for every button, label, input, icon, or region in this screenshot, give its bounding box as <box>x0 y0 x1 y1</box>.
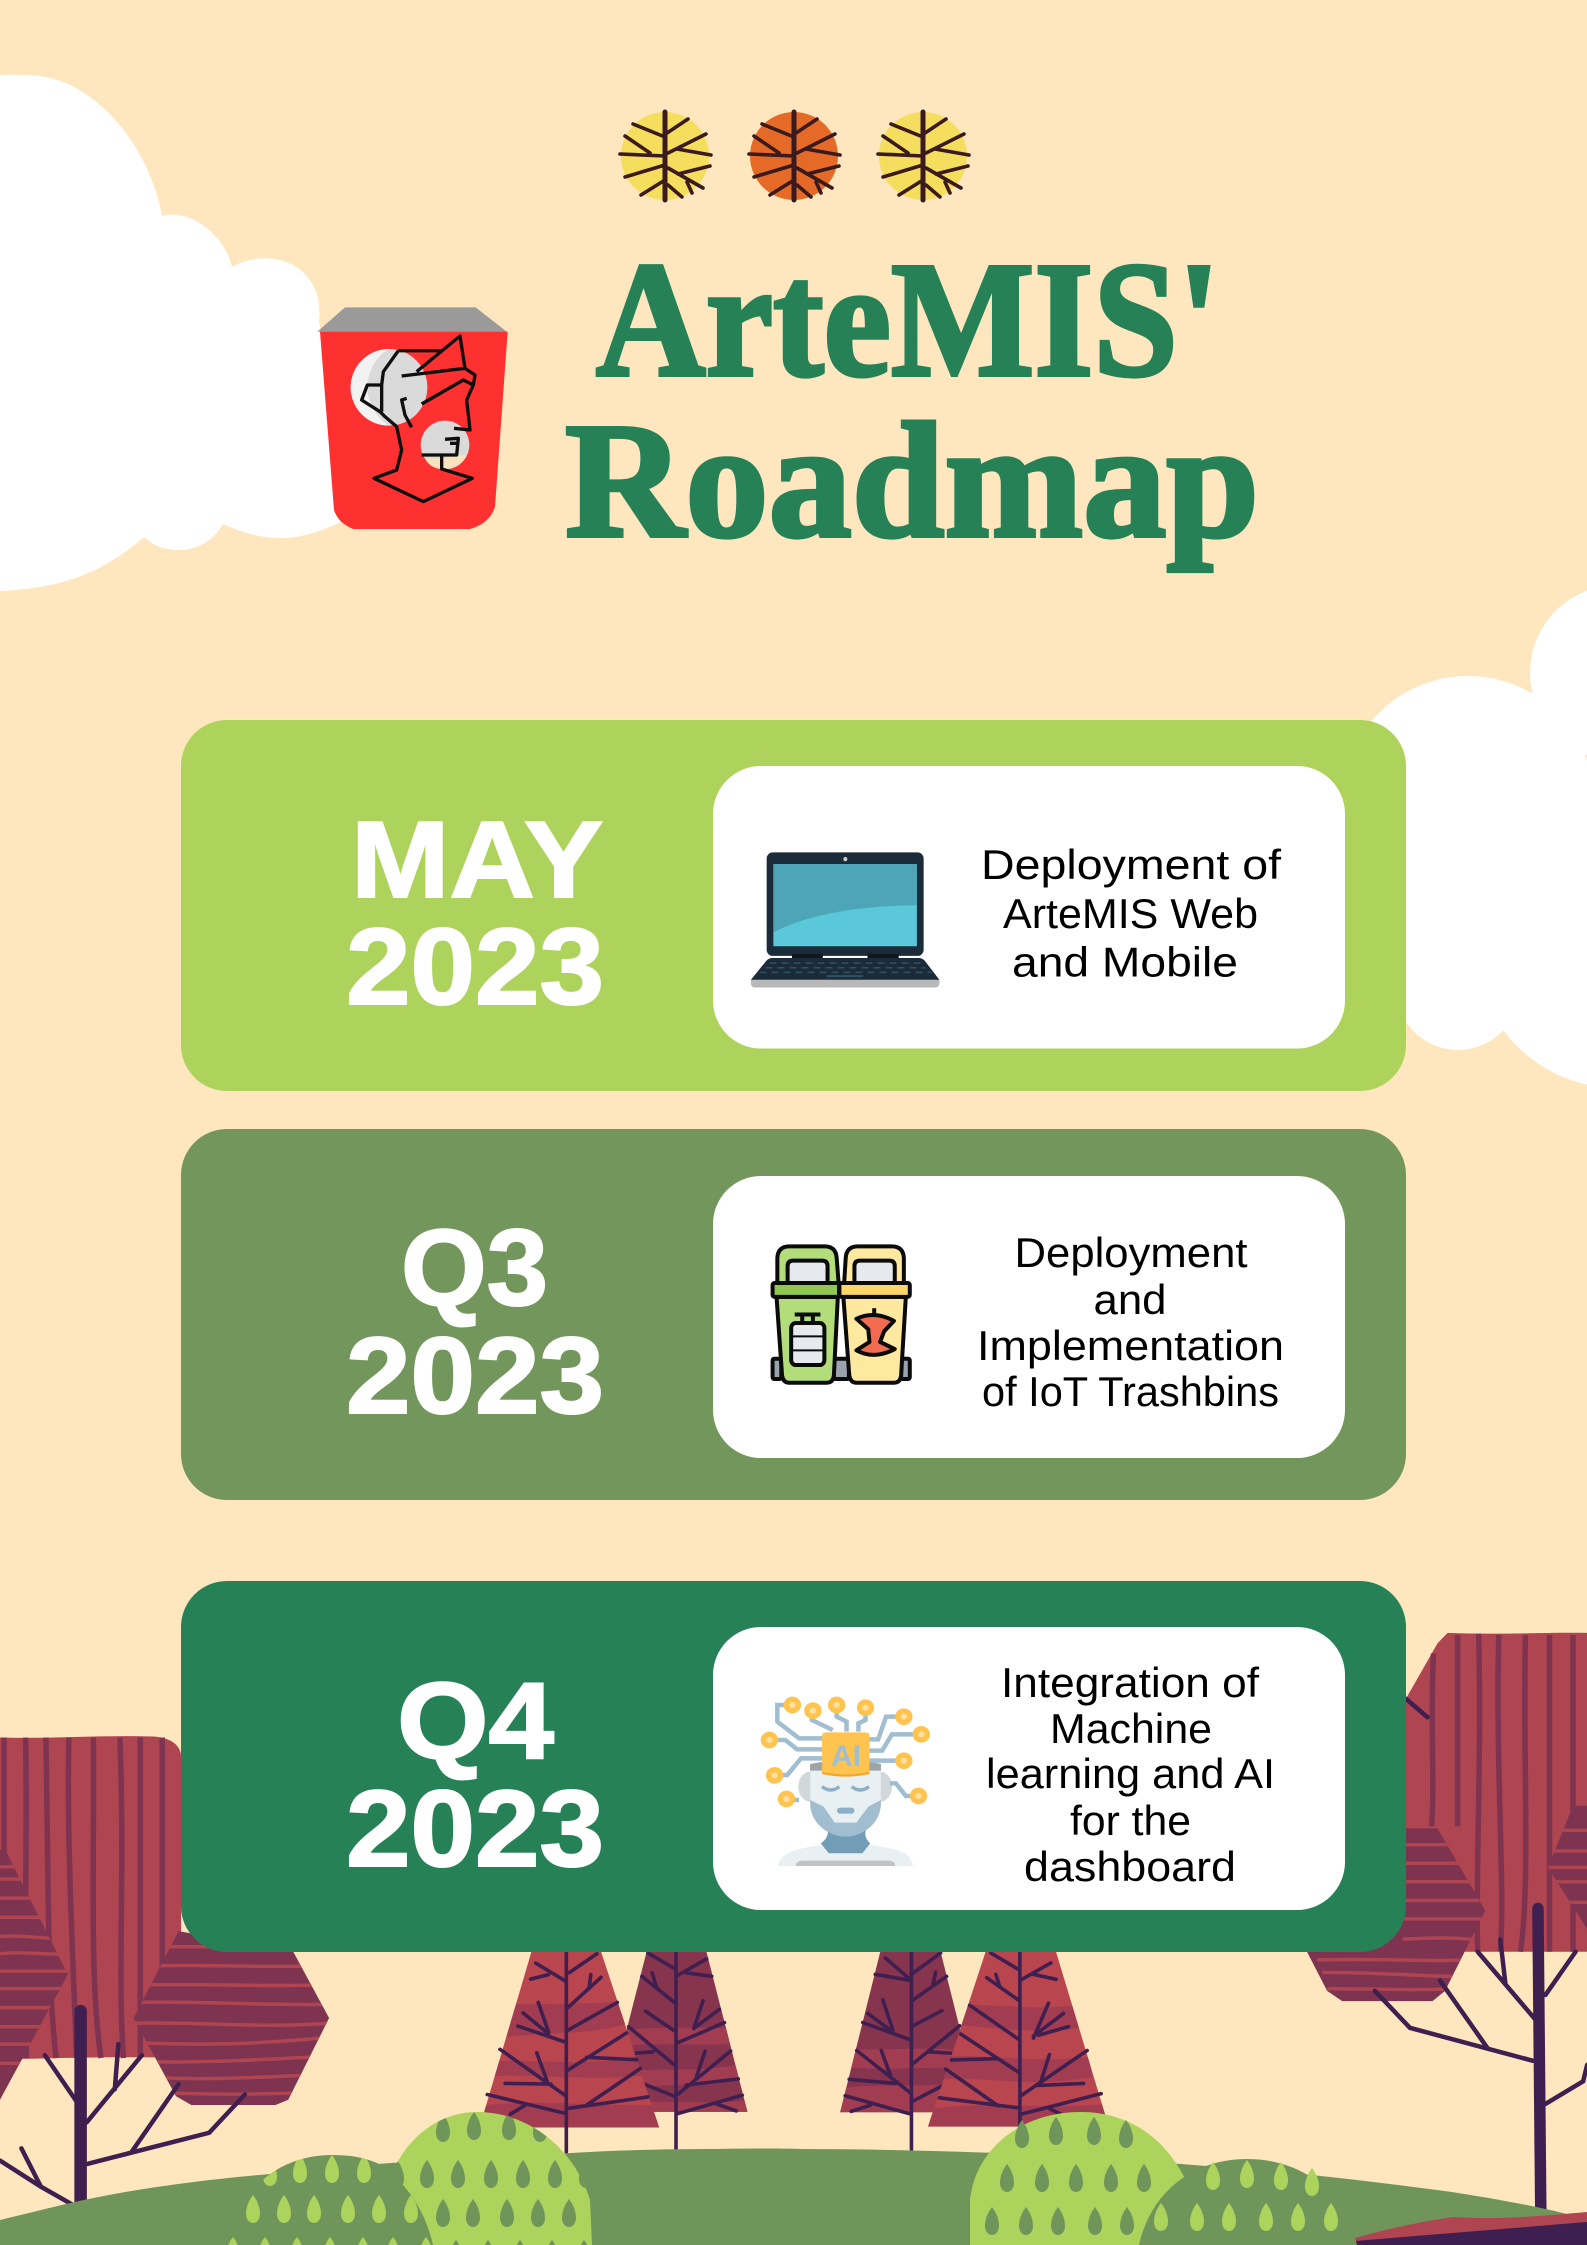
icon: AI head: AI <box>831 1740 861 1773</box>
heading: Q4 2023 <box>346 1660 604 1890</box>
heading: Q4 2023: 2023 <box>346 1768 604 1890</box>
text: deployment of IoT trashbins <box>977 1229 1284 1415</box>
text: machine learning and AI integration <box>986 1659 1275 1890</box>
text: deployment of IoT trashbins: Deployment <box>1014 1229 1248 1276</box>
panel: Q4 2023 <box>181 1581 1406 1952</box>
heading: Q3 2023: Q3 <box>401 1207 548 1329</box>
tree C <box>840 1952 962 2150</box>
tree: left large striped crown <box>0 1736 332 2204</box>
yellow bin <box>839 1246 910 1383</box>
white card <box>713 1627 1345 1910</box>
panel: May 2023 <box>181 720 1406 1091</box>
heading: Q4 2023: Q4 <box>397 1660 554 1782</box>
title: Roadmap <box>565 389 1259 572</box>
tree: right large striped crown <box>1307 1633 1587 2001</box>
tree: left branches <box>0 2011 245 2204</box>
tree: left hexagon crown far <box>0 1849 71 2100</box>
bush: right dark <box>1139 2159 1357 2245</box>
tree: right trunk and branches <box>1375 1909 1587 2229</box>
bush: left light <box>390 2112 593 2245</box>
tree A <box>484 1952 660 2154</box>
tree B <box>626 1952 748 2150</box>
panel: Q3 2023 <box>181 1129 1406 1500</box>
text: machine learning and AI integration: dashboard <box>1024 1843 1236 1890</box>
green bin <box>773 1246 839 1383</box>
icon: recycling bins <box>773 1246 910 1383</box>
heading: May 2023 <box>346 799 604 1028</box>
bush: left dark <box>226 2155 433 2245</box>
triangle trees: left pair <box>484 1952 748 2154</box>
text: deployment of IoT trashbins: and <box>1094 1276 1166 1323</box>
tree: right hexagon crown <box>1307 1828 1485 2001</box>
icon: AI head <box>761 1697 930 1866</box>
icon: laptop <box>751 852 939 988</box>
text: machine learning and AI integration: Machine <box>1050 1705 1212 1752</box>
hill <box>0 2149 1587 2245</box>
text: deployment of web and mobile: ArteMIS Web <box>1003 890 1258 937</box>
decorative leaf icons <box>620 112 969 200</box>
title <box>565 228 1259 572</box>
heading: Q3 2023 <box>346 1207 604 1437</box>
white card <box>713 766 1345 1048</box>
tree: left hexagon crown near <box>130 1931 332 2105</box>
heading: Q3 2023: 2023 <box>346 1315 604 1437</box>
text: machine learning and AI integration: Integration of <box>1001 1659 1259 1706</box>
heading: May 2023: 2023 <box>346 906 604 1028</box>
icon: yellow leaf <box>878 112 969 200</box>
text: deployment of IoT trashbins: Implementation <box>977 1322 1284 1369</box>
text: machine learning and AI integration: for the <box>1070 1797 1191 1844</box>
white card <box>713 1176 1345 1458</box>
bush: right light <box>970 2112 1190 2245</box>
icon: orange leaf <box>749 112 840 200</box>
logo: ArteMIS red bin <box>317 307 508 529</box>
cloud: top left <box>0 75 345 591</box>
text: machine learning and AI integration: learning and AI <box>986 1750 1275 1797</box>
icon: yellow leaf <box>620 112 711 200</box>
triangle trees: right pair <box>840 1902 1587 2210</box>
tree: right edge hexagon crown <box>1548 1806 1587 1929</box>
text: deployment of web and mobile: Deployment of <box>981 841 1281 888</box>
tree D <box>928 1952 1105 2127</box>
heading: May 2023: MAY <box>351 799 603 921</box>
text: deployment of IoT trashbins: of IoT Trashbins <box>982 1368 1279 1415</box>
title: ArteMIS' <box>596 228 1220 411</box>
text: deployment of web and mobile <box>981 841 1281 986</box>
text: deployment of web and mobile: and Mobile <box>1012 938 1238 986</box>
cloud: right <box>1342 585 1587 1088</box>
ground: bottom right strip <box>1355 2212 1587 2245</box>
